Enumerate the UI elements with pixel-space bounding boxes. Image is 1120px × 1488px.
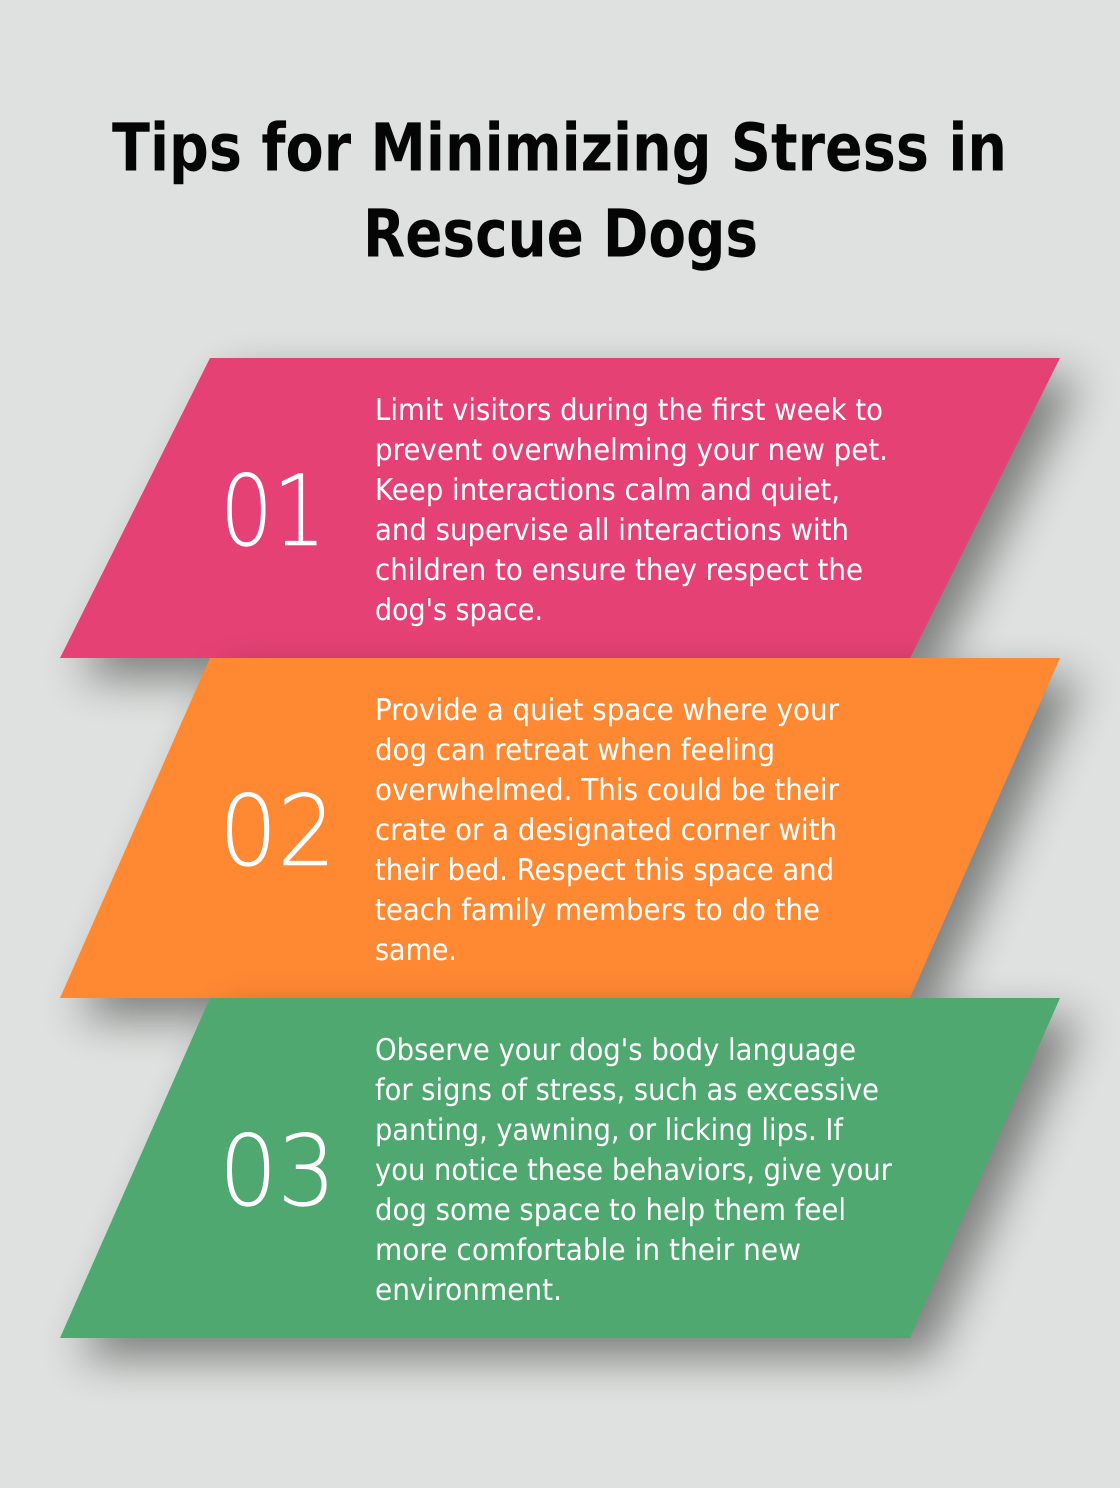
tip 02 text: their bed. Respect this space and [375,853,834,888]
tip 03 text: environment. [375,1273,562,1308]
number 03: 03 [219,1115,336,1229]
tip 03 text [375,1033,893,1308]
tip 03 text: Observe your dog's body language [375,1033,856,1068]
tip 03 text: for signs of stress, such as excessive [375,1073,879,1108]
panel: tip 02 [60,658,1060,998]
tip 01 text: Limit visitors during the first week to [375,393,883,428]
tip 01 text: Keep interactions calm and quiet, [375,473,840,508]
tip 02 text: overwhelmed. This could be their [375,773,840,808]
number 01: 01 [220,455,326,569]
tip 02 text [375,693,840,968]
tip 03 text: dog some space to help them feel [375,1193,846,1228]
title [112,110,1007,272]
tip 02 text: same. [375,933,457,968]
title: Rescue Dogs [363,196,758,272]
orange parallelogram [60,658,1060,998]
tip 01 text: children to ensure they respect the [375,553,863,588]
panel: tip 01 [60,358,1060,658]
pink parallelogram [60,358,1060,658]
green parallelogram [60,998,1060,1338]
panel: tip 03 [60,998,1060,1338]
tip 02 text: dog can retreat when feeling [375,733,775,768]
tip 01 text: prevent overwhelming your new pet. [375,433,888,468]
tip 02 text: Provide a quiet space where your [375,693,840,728]
tip 03 text: panting, yawning, or licking lips. If [375,1113,844,1148]
tip 01 text [375,393,888,628]
tip 02 text: crate or a designated corner with [375,813,837,848]
tip 03 text: more comfortable in their new [375,1233,801,1268]
number 02: 02 [219,775,336,889]
tip 03 text: you notice these behaviors, give your [375,1153,893,1188]
tip 02 text: teach family members to do the [375,893,820,928]
tip 01 text: and supervise all interactions with [375,513,849,548]
tip 01 text: dog's space. [375,593,543,628]
